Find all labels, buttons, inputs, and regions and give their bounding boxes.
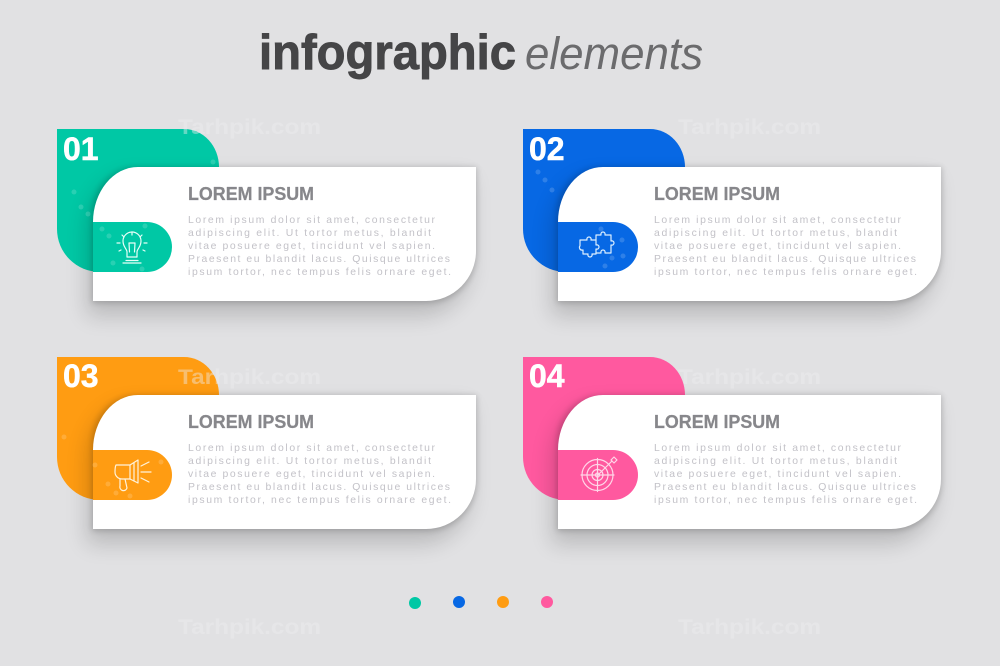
body text: vitae posuere eget, tincidunt vel sapien. [188,241,435,252]
panel: step 01 [57,129,477,316]
body text: Praesent eu blandit lacus. Quisque ultrices [188,254,450,265]
body text: Praesent eu blandit lacus. Quisque ultrices [654,254,916,265]
icon pill [93,450,172,500]
heading: LOREM IPSUM [188,411,314,432]
heading: LOREM IPSUM [654,183,780,204]
body text: ipsum tortor, nec tempus felis ornare eget. [188,267,451,278]
body text: Lorem ipsum dolor sit amet, consectetur [654,215,902,226]
body text: ipsum tortor, nec tempus felis ornare eget. [188,495,451,506]
watermarks: Tarhpik.com [178,616,321,639]
body text: Praesent eu blandit lacus. Quisque ultrices [654,482,916,493]
number tab: 01 [57,129,219,272]
number: 02: 02 [529,131,565,167]
icon pill [558,222,638,272]
heading: LOREM IPSUM [188,183,314,204]
body text [654,443,917,506]
body text [188,443,451,506]
number tab: 02 [523,129,685,272]
watermarks: Tarhpik.com [178,116,321,139]
heading: LOREM IPSUM [654,411,780,432]
body text: Lorem ipsum dolor sit amet, consectetur [188,443,436,454]
white card [93,167,476,301]
icon: megaphone [115,460,151,491]
body text: Praesent eu blandit lacus. Quisque ultrices [188,482,450,493]
body text: adipiscing elit. Ut tortor metus, blandit [654,228,897,239]
body text [654,215,917,278]
icon: target [581,457,617,492]
card shadow [552,167,942,316]
panel: step 02 [523,129,942,316]
number tab: 03 [57,357,219,500]
body text: ipsum tortor, nec tempus felis ornare eget. [654,495,917,506]
title: infographic [259,26,516,80]
icon pill [93,222,172,272]
pagination dots [409,596,553,609]
body text: Lorem ipsum dolor sit amet, consectetur [188,215,436,226]
body text: adipiscing elit. Ut tortor metus, blandit [188,456,431,467]
card shadow [87,395,477,544]
panel: step 04 [523,357,942,544]
icon pill [558,450,638,500]
watermarks: Tarhpik.com [678,116,821,139]
title: elements [525,28,703,79]
specks [72,160,216,272]
body text: vitae posuere eget, tincidunt vel sapien. [654,241,901,252]
card shadow [87,167,477,316]
icon: puzzle pieces [579,232,614,257]
specks [62,434,164,498]
watermarks: Tarhpik.com [678,616,821,639]
specks [536,170,626,268]
number: 04: 04 [529,358,565,394]
watermarks: Tarhpik.com [678,366,821,389]
card shadow [552,395,942,544]
white card [558,167,941,301]
body text: vitae posuere eget, tincidunt vel sapien. [188,469,435,480]
watermarks: Tarhpik.com [178,366,321,389]
body text: ipsum tortor, nec tempus felis ornare eget. [654,267,917,278]
title [259,26,703,80]
body text: vitae posuere eget, tincidunt vel sapien. [654,469,901,480]
body text: Lorem ipsum dolor sit amet, consectetur [654,443,902,454]
body text: adipiscing elit. Ut tortor metus, blandit [188,228,431,239]
body text: adipiscing elit. Ut tortor metus, blandit [654,456,897,467]
number: 01: 01 [63,131,99,167]
number: 03: 03 [63,358,99,394]
body text [188,215,451,278]
icon: light bulb [117,232,147,263]
white card [558,395,941,529]
number tab: 04 [523,357,685,500]
panel: step 03 [57,357,477,544]
white card [93,395,476,529]
watermarks [178,116,821,639]
